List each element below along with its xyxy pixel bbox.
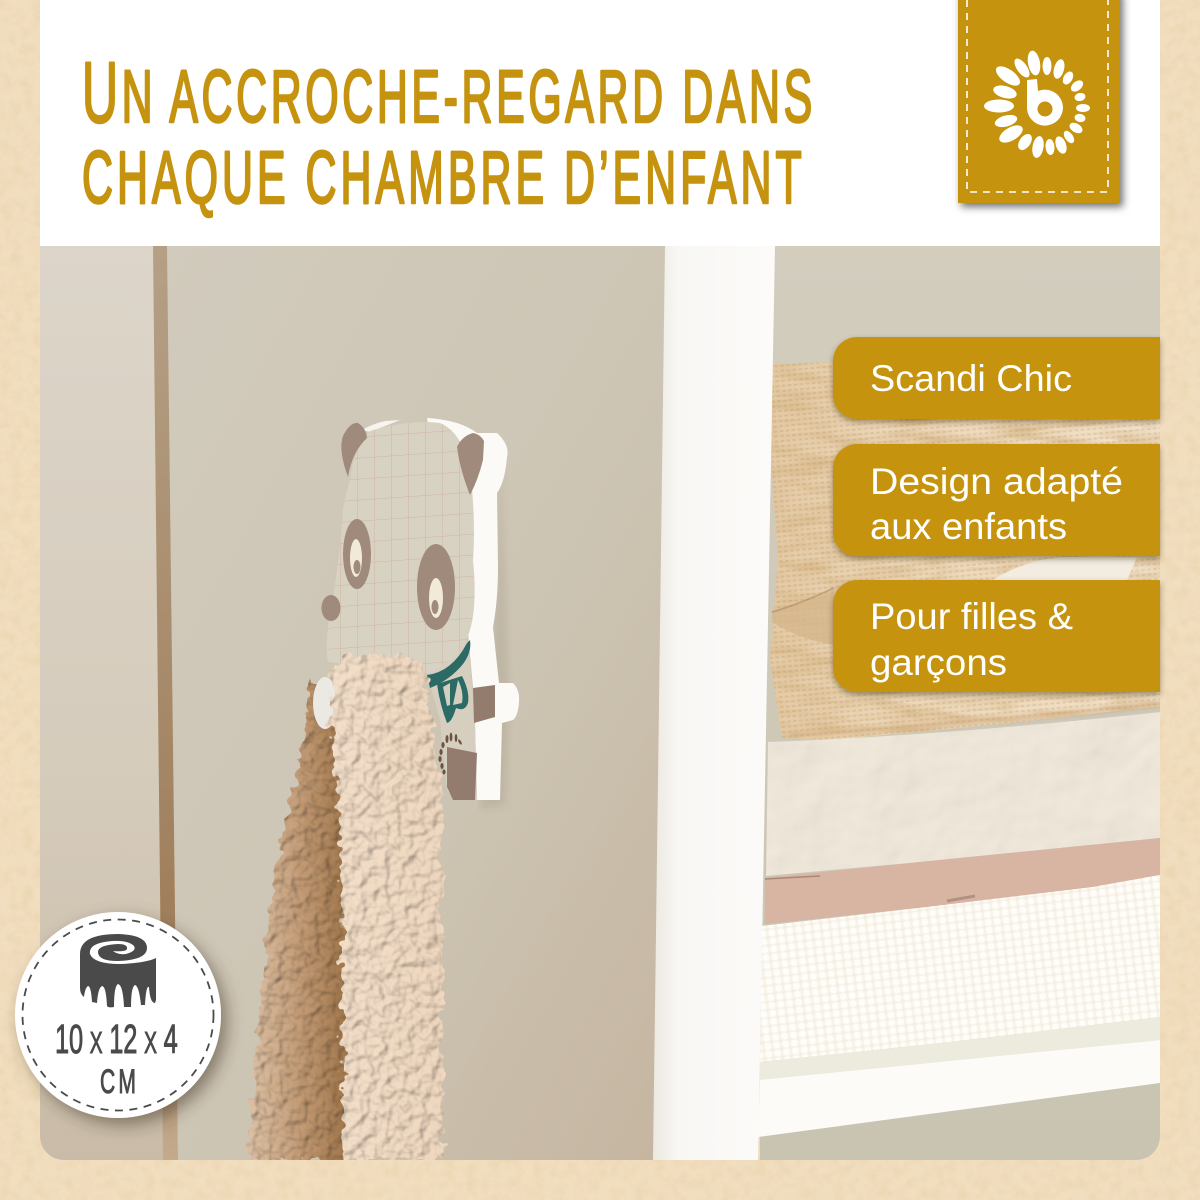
panda left ear: [341, 423, 367, 477]
panda coat hook: [313, 418, 519, 800]
teal collar and letter: [427, 640, 470, 723]
label: Design adapté aux enfants: Design adapté: [870, 461, 1123, 502]
towel front strip: [330, 655, 443, 1160]
label: Design adapté aux enfants: [833, 444, 1160, 556]
hook rear peg: [313, 677, 337, 729]
folded knit blanket: [770, 362, 1160, 740]
icon: brand flower logo: [984, 50, 1090, 159]
label: Scandi Chic: Scandi Chic: [870, 358, 1072, 399]
panda right eye: [417, 544, 455, 630]
dimensions text: 10 X 12 X 4: [55, 1017, 178, 1063]
door panel: [167, 246, 670, 1160]
white knit blanket: [760, 875, 1160, 1062]
panda face grid: [327, 422, 475, 673]
hedgehog block: [438, 732, 477, 800]
photo scene: [40, 246, 1160, 1160]
left wall: [40, 246, 170, 1160]
dimensions text: CM: [100, 1062, 136, 1100]
folded linen: [766, 712, 1160, 876]
folded pink cloth: [765, 838, 1160, 924]
size badge: [15, 912, 221, 1118]
white shelf post: [653, 246, 775, 1160]
title: [82, 44, 812, 219]
panda nose: [322, 595, 340, 621]
wall shadow gap: [153, 246, 178, 1160]
hook top white rim: [362, 420, 400, 432]
panda left eye: [343, 519, 371, 589]
label: Pour filles & garçons: garçons: [870, 642, 1007, 683]
towel back strip: [247, 676, 346, 1160]
label: Pour filles & garçons: [833, 580, 1160, 692]
title: CHAQUE CHAMBRE D’ENFANT: [82, 136, 802, 219]
label: Scandi Chic: [833, 337, 1160, 419]
label: Pour filles & garçons: Pour filles &: [870, 596, 1073, 637]
hook lower body: [427, 640, 477, 800]
panda right ear: [457, 433, 484, 495]
hook white edge: [427, 418, 519, 800]
peg brown band: [473, 685, 495, 723]
panda shadow: [482, 526, 508, 808]
shelf interior: [760, 246, 1160, 1160]
bottom shelf: [758, 1017, 1160, 1137]
title: UN ACCROCHE-REGARD DANS: [82, 44, 812, 140]
label: Design adapté aux enfants: aux enfants: [870, 506, 1067, 547]
icon: measuring tape: [80, 934, 156, 1007]
dimensions text: [55, 1017, 178, 1100]
white header band: [40, 0, 1160, 246]
brand tag: [958, 0, 1120, 203]
